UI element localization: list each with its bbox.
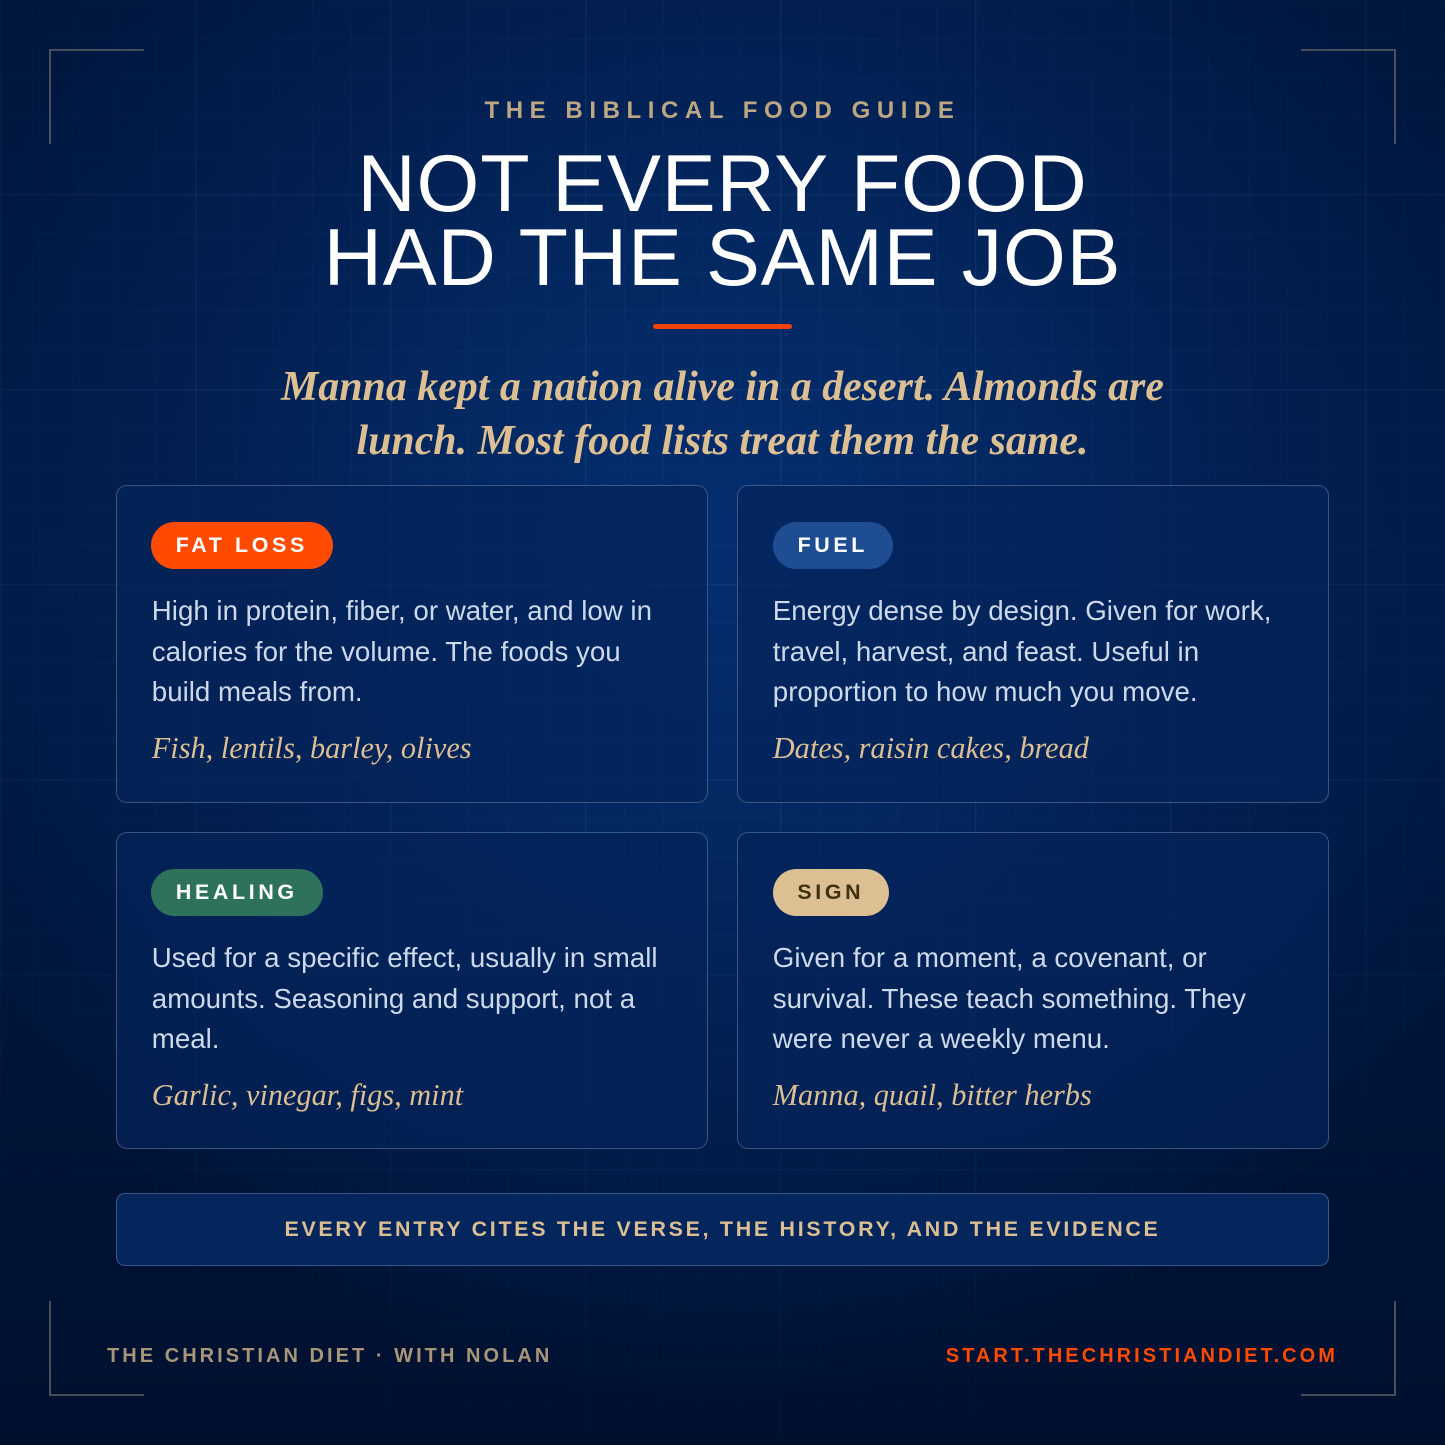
description: fuel: proportion to how much you move. [773, 676, 1198, 707]
description: healing: meal. [152, 1023, 220, 1054]
description: fat loss: High in protein, fiber, or water, and low in [152, 595, 652, 626]
description: sign: Given for a moment, a covenant, or [773, 942, 1207, 973]
subtitle: Manna kept a nation alive in a desert. Almonds are [281, 364, 1164, 410]
tag: sign [773, 869, 889, 916]
examples: fuel: Dates, raisin cakes, bread [773, 731, 1089, 765]
footer right: START.THECHRISTIANDIET.COM [946, 1345, 1338, 1367]
banner: EVERY ENTRY CITES THE VERSE, THE HISTORY, AND THE EVIDENCE [284, 1217, 1161, 1241]
description: sign: survival. These teach something. They [773, 983, 1246, 1014]
tag: fat loss: FAT LOSS [176, 533, 308, 557]
description: fat loss: calories for the volume. The foods you [152, 636, 621, 667]
description: healing [152, 942, 658, 1054]
tag: sign: SIGN [797, 880, 864, 904]
tag: healing [151, 869, 323, 916]
panel: sign [737, 832, 1329, 1149]
description: sign [772, 942, 1246, 1054]
footer left: THE CHRISTIAN DIET · WITH NOLAN [107, 1345, 552, 1367]
description: fat loss [152, 595, 652, 707]
tag: fuel: FUEL [798, 533, 868, 557]
corner bracket: top right [1301, 49, 1396, 144]
description: fuel: Energy dense by design. Given for work, [773, 595, 1271, 626]
corner bracket: bottom right [1301, 1301, 1396, 1396]
tag: fat loss [151, 522, 333, 569]
description: healing: Used for a specific effect, usually in small [152, 942, 658, 973]
corner bracket: top left [49, 49, 144, 144]
description: sign: were never a weekly menu. [773, 1023, 1110, 1054]
banner [116, 1193, 1329, 1266]
subtitle: lunch. Most food lists treat them the same. [356, 418, 1088, 464]
panel: fat loss [116, 485, 708, 803]
corner bracket: bottom left [49, 1301, 144, 1396]
examples: fat loss: Fish, lentils, barley, olives [152, 731, 472, 765]
accent rule [653, 324, 792, 329]
eyebrow heading: THE BIBLICAL FOOD GUIDE [484, 97, 960, 124]
description: fuel [773, 595, 1271, 707]
subtitle [280, 364, 1164, 464]
title: HAD THE SAME JOB [324, 212, 1121, 302]
examples: healing: Garlic, vinegar, figs, mint [152, 1078, 463, 1112]
tag: healing: HEALING [176, 880, 298, 904]
panel: healing [116, 832, 708, 1149]
tag: fuel [773, 522, 893, 569]
description: fat loss: build meals from. [152, 676, 363, 707]
description: fuel: travel, harvest, and feast. Useful in [773, 636, 1199, 667]
title [324, 138, 1121, 302]
examples: sign: Manna, quail, bitter herbs [773, 1078, 1092, 1112]
description: healing: amounts. Seasoning and support, not a [152, 983, 635, 1014]
panel: fuel [737, 485, 1329, 803]
title: NOT EVERY FOOD [357, 138, 1088, 228]
